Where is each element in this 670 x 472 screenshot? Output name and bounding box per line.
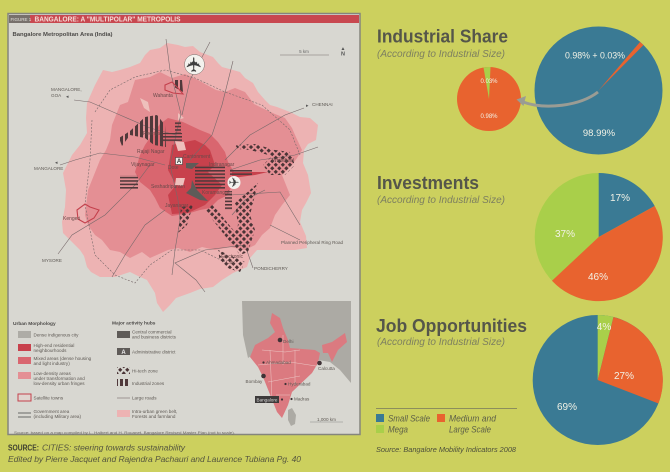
map header bar: BANGALORE: A "MULTIPOLAR" METROPOLIS: [34, 14, 181, 24]
icon: administrative district: A: [177, 159, 182, 165]
map: scale and north: [280, 46, 345, 58]
legend: urban morphology: and light industry): [34, 361, 70, 366]
source credit: SOURCE:: [8, 442, 39, 452]
legend: activity hubs: A: [121, 350, 126, 356]
legend: urban morphology: Low-density areas: [34, 371, 71, 376]
legend: urban morphology: neighbourhoods: [34, 348, 67, 353]
map: scale and north: 5 km: [299, 49, 309, 54]
map: scale and north: ▲: [341, 46, 345, 52]
map: place labels: Koramangala: [202, 190, 232, 196]
map: roads: [58, 39, 318, 292]
legend: activity hubs: [112, 320, 177, 419]
map: urban extent: [62, 43, 318, 312]
legend: urban morphology: (including Military area): [34, 414, 81, 419]
legend: activity hubs: and business districts: [132, 334, 177, 340]
chart: industrial share large pie: 0.98% + 0.03%: [565, 50, 625, 60]
legend: urban morphology: under transformation and: [34, 376, 85, 381]
inset: India map: Delhi: [283, 339, 293, 344]
inset: India map: Bangalore: [256, 397, 278, 402]
chart: jobs pie: 69%: [557, 402, 577, 413]
map header bar: FIGURE 1: [10, 17, 32, 22]
map legend: [13, 320, 177, 419]
map: place labels: ◂: [66, 94, 69, 100]
inset: India map: Ahmadabad: [266, 360, 291, 365]
map: place labels: Indiranagar: [209, 162, 235, 168]
data source note: Source: Bangalore Mobility Indicators 2008: [376, 447, 516, 454]
legend: industry size: Small Scale: [388, 414, 430, 424]
heading: Industrial Share: Industrial Share: [377, 26, 508, 46]
icon: airport north: ✈: [184, 56, 206, 73]
chart: investments pie: 37%: [555, 229, 575, 240]
map: place labels: Seshadripuram: [151, 184, 185, 190]
legend: urban morphology: low-density urban fringes: [34, 381, 85, 386]
chart: jobs pie: 27%: [614, 371, 634, 382]
heading: Investments: (According to Industrial Size): [377, 195, 505, 206]
chart: investments pie: [535, 173, 663, 301]
legend: urban morphology: Government area: [34, 409, 70, 414]
map: satellite towns: [77, 82, 183, 223]
map: place labels: PONDICHERRY: [254, 266, 288, 271]
high-end residential: [168, 140, 222, 214]
chart: industrial share small pie: 0.98%: [480, 114, 498, 120]
map: place labels: MANGALORE: [34, 166, 63, 171]
legend: industry size: Large Scale: [449, 424, 491, 434]
map: place labels: MANGALORE,: [51, 87, 82, 92]
map: place labels: Dote: [168, 165, 179, 171]
icon: airport city: ✈: [229, 175, 240, 190]
legend: industry size: Medium and: [449, 414, 497, 424]
green gaps: [140, 98, 186, 186]
inset: India map: Hyderabad: [288, 382, 311, 386]
map: place labels: City: [226, 260, 235, 266]
map: place labels: Jayanagar: [165, 203, 189, 209]
legend: activity hubs: Hi-tech zone: [132, 368, 158, 374]
map: place labels: CHENNAI: [312, 102, 333, 107]
heading: Investments: [377, 172, 505, 206]
mixed areas: [135, 118, 234, 216]
map: place labels: MYSORE: [42, 258, 62, 263]
low-density areas: [85, 72, 302, 258]
chart: investments pie: 17%: [610, 193, 630, 204]
legend: activity hubs: Industrial zones: [132, 381, 165, 386]
source credit: [8, 442, 301, 464]
chart: jobs pie: [533, 315, 663, 445]
chart: jobs pie: 4%: [597, 322, 611, 333]
panel: Bangalore map: [8, 14, 360, 435]
map: place labels: Electronic: [221, 254, 243, 260]
map header bar: [9, 14, 359, 24]
map: place labels: Rajaji Nagar: [137, 149, 165, 155]
legend: activity hubs: Major activity hubs: [112, 320, 156, 326]
map: central business districts: [186, 163, 208, 201]
chart: industrial share large pie: 98.99%: [583, 128, 616, 139]
inset: India map: Calcutta: [318, 366, 335, 371]
legend: urban morphology: High-end residential: [34, 343, 74, 348]
source credit: CITIES: steering towards sustainability: [42, 442, 186, 452]
chart: industrial share small pie: [457, 67, 521, 131]
heading: Industrial Share: [377, 26, 508, 60]
heading: Job Opportunities: [376, 315, 527, 348]
inset: India map: 1,000 km: [317, 417, 336, 422]
legend: industry size: Mega: [388, 424, 408, 434]
map: place labels: Vijaynagar: [131, 162, 155, 168]
map: place labels: Whitefield: [272, 158, 294, 164]
legend: activity hubs: Central commercial: [132, 330, 172, 334]
legend: urban morphology: Mixed areas (dense housing: [34, 356, 92, 361]
icon: administrative district: [176, 158, 182, 165]
legend: industry size: [376, 408, 517, 434]
map: place labels: ▸: [306, 103, 309, 109]
green belt zone: [62, 43, 318, 312]
arrow: breakdown: [516, 92, 598, 106]
map subtitle: Bangalore Metropolitan Area (India): [12, 32, 113, 38]
inset: India map: [242, 301, 351, 426]
heading: Industrial Share: (According to Industrial Size): [377, 49, 505, 60]
map: place labels: Planned Peripheral Ring Road: [281, 240, 344, 245]
legend: activity hubs: Intra-urban green belt,: [132, 409, 177, 414]
map: place labels: Cantonment: [183, 154, 211, 160]
legend: activity hubs: Forests and farmland: [132, 414, 176, 419]
map: scale and north: N: [341, 52, 345, 58]
map: place labels: GOA: [51, 93, 62, 98]
heading: Job Opportunities: (According to Industrial Size): [377, 337, 505, 348]
map: place labels: ◂: [55, 160, 58, 166]
chart: industrial share large pie: [534, 26, 662, 154]
map footnote: Source: based on a map compiled by L. Halbert and H. Rouanet, Bangalore Revised Master Plan (not to scale).: [14, 430, 235, 435]
map: place labels: Wahanta: [153, 93, 173, 99]
map: hi-tech zones: [178, 144, 295, 272]
map: place labels: Kengeri: [63, 216, 80, 222]
legend: urban morphology: Dense indigenous city: [34, 332, 79, 338]
chart: industrial share small pie: 0.03%: [480, 79, 498, 85]
legend: activity hubs: Administrative district: [132, 350, 176, 354]
map: place labels: [34, 87, 344, 271]
heading: Job Opportunities: Job Opportunities: [376, 315, 527, 336]
chart: investments pie: 46%: [588, 272, 608, 283]
legend: urban morphology: Satellite towns: [34, 396, 64, 400]
inset: India map: Bombay: [246, 379, 263, 384]
legend: activity hubs: Large roads: [132, 396, 157, 400]
map: industrial zones: [119, 80, 252, 210]
source credit: Edited by Pierre Jacquet and Rajendra Pachauri and Laurence Tubiana Pg. 40: [8, 454, 301, 464]
legend: urban morphology: [13, 321, 92, 419]
inset: India map: Madras: [294, 396, 310, 402]
heading: Investments: Investments: [377, 172, 479, 193]
map: place labels: Peenya: [143, 131, 160, 137]
legend: urban morphology: Urban Morphology: [13, 321, 56, 327]
